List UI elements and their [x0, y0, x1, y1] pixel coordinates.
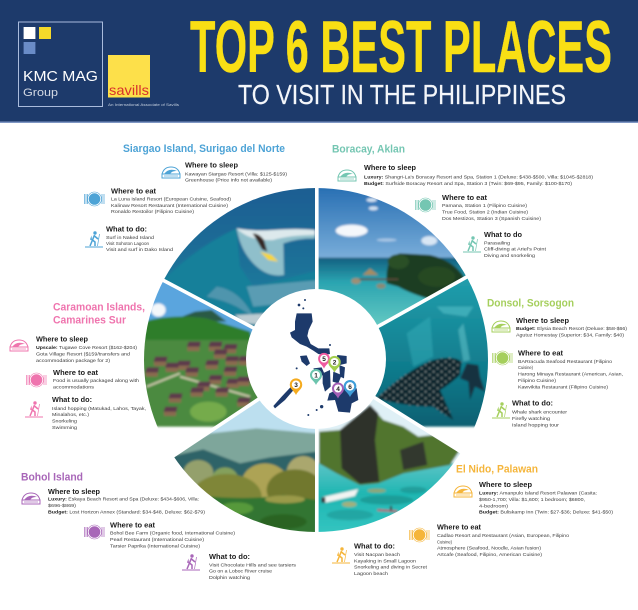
map: Philippine islands — [273, 299, 358, 416]
text: where to sleep: $950-1,700; Villa: $1,600; 1 bedroom; $6800, — [479, 497, 585, 503]
text: what to do: Visit Chocolate Hills and see tarsiers — [209, 562, 297, 568]
heading: Caramoan: Caramoan Islands, — [53, 302, 145, 314]
heading: Siargao: Siargao Island, Surigao del Norte — [123, 143, 285, 155]
text: where to sleep: Upscale: Tugawe Cove Resort ($162-$204) — [36, 345, 137, 351]
icon: eat — [493, 351, 512, 365]
pin 3 — [290, 378, 302, 395]
text: what to do: Go on a Loboc River cruise — [209, 569, 272, 575]
text: what to do: Lagoon beach — [354, 571, 388, 577]
text: where to sleep: Gota Village Resort ($159/transfers and — [36, 352, 130, 358]
text: what to do — [52, 395, 146, 431]
text: where to sleep: Luxury: Eskaya Beach Resort and Spa (Deluxe: $434-$606, Villa: — [48, 497, 199, 503]
text: where to sleep: Where to sleep — [516, 316, 569, 325]
text: what to do: Firefly watching — [512, 416, 550, 422]
text: what to do — [484, 230, 547, 259]
text: where to sleep: Budget: Surfside Boracay Resort and Spa, Station 3 (Twin: $69-$95, Family: $100-$170) — [364, 181, 572, 187]
heading: Boracay: Boracay, Aklan — [332, 144, 405, 156]
heading: Donsol: Donsol, Sorsogon — [487, 298, 574, 310]
logo: savills: An International Associate of Savills — [108, 102, 179, 107]
icon: eat — [85, 525, 104, 539]
heading: Caramoan: Camarines Sur — [53, 314, 127, 326]
text: where to sleep: Kawayan Siargao Resort (Villa: $125-$159) — [185, 172, 287, 178]
text: where to eat — [111, 186, 231, 215]
heading: El Nido: El Nido, Palawan — [456, 464, 538, 476]
text: where to sleep — [516, 316, 627, 338]
text: where to eat — [442, 193, 541, 222]
text: where to sleep — [364, 163, 593, 187]
photo: El Nido lagoon — [318, 399, 460, 532]
pin numbers: 5 — [322, 356, 326, 363]
icon: eat — [416, 198, 435, 212]
pin 1 — [310, 369, 322, 385]
text: what to do: Minalahos, etc.) — [52, 412, 89, 418]
text: what to do: Snorkeling — [52, 418, 77, 424]
photo: whale shark and diver, Donsol — [375, 278, 488, 428]
text: where to eat: Artcafe (Seafood, Filipino, American Cuisine) — [437, 552, 542, 558]
text: what to do: Visit Nacpan beach — [354, 552, 400, 558]
text: where to sleep: Agutuz Homestay (Superior: $34, Family: $40) — [516, 332, 624, 338]
text: where to eat — [518, 349, 623, 390]
text: what to do: What to do: — [209, 552, 250, 561]
text: where to eat: Cuisine) — [437, 539, 452, 545]
text: where to eat: Cadlao Resort and Restaurant (Asian, European, Filipino — [437, 533, 569, 539]
pin numbers — [294, 356, 352, 393]
text: where to sleep: Budget: Buliskamp Inn (Twin: $27-$36; Deluxe: $41-$50) — [479, 510, 613, 516]
text: where to sleep: Where to sleep — [364, 163, 416, 172]
icon: sleep — [492, 321, 510, 332]
logo: savills: savills — [109, 82, 149, 98]
icon: do — [463, 236, 481, 252]
text: where to sleep: $696-$869) — [48, 503, 76, 509]
icon: do — [332, 547, 350, 563]
pin numbers: 2 — [333, 360, 337, 366]
text: what to do: Visit Sohoton Lagoon — [106, 241, 149, 247]
text: what to do: Dolphin watching — [209, 575, 250, 581]
text: what to do: What to do: — [52, 395, 92, 404]
map of the Philippines with pins — [246, 289, 386, 429]
text: where to eat — [110, 521, 235, 549]
header banner — [0, 0, 638, 123]
text: where to eat: Bohol Bee Farm (Organic food, International Cuisine) — [110, 531, 235, 537]
text: where to eat — [437, 523, 569, 558]
icon: do — [182, 554, 200, 570]
text: where to eat: Where to eat — [437, 523, 482, 532]
wheel dividers — [140, 180, 490, 540]
text: where to sleep: Where to sleep — [479, 480, 532, 489]
text: what to do: Surf in Naked Island — [106, 235, 154, 241]
icon: sleep — [22, 493, 40, 504]
photo: Chocolate Hills, Bohol — [174, 400, 315, 532]
panel: Donsol — [487, 298, 627, 428]
text: what to do: Island hopping (Matukad, Lahos, Tayak, — [52, 406, 146, 412]
text: where to sleep: Budget: Lost Horizon Annex (Standard: $34-$48, Deluxe: $62-$79) — [48, 510, 205, 516]
icon: do — [25, 401, 43, 417]
panel: Bohol Island — [21, 472, 297, 581]
text: where to eat: Where to eat — [53, 368, 99, 377]
text: where to sleep: 4-bedroom) — [479, 503, 508, 509]
text: where to sleep: Where to sleep — [36, 334, 88, 344]
pin 5 — [318, 353, 330, 368]
logo: KMC MAG Group: Group — [23, 87, 58, 99]
text: what to do: Kayaking in Small Lagoon — [354, 558, 416, 564]
pin numbers: 3 — [294, 382, 298, 389]
icon: sleep — [338, 170, 356, 181]
text: where to eat: accommodations — [53, 384, 95, 390]
text: what to do: Cliff-diving at Ariel's Point — [484, 247, 547, 253]
photo: surfer on a wave, Siargao — [164, 188, 315, 326]
text: what to do: What to do: — [354, 542, 395, 551]
text: where to sleep: Budget: Elysia Beach Resort (Deluxe: $58-$66) — [516, 326, 627, 332]
photo: Caramoan resort — [144, 282, 258, 428]
panel: Siargao Island — [85, 143, 287, 253]
pin numbers: 4 — [336, 386, 340, 393]
text: where to eat: Harong Minaya Restaurant (American, Asian, — [518, 372, 623, 378]
photo: Boracay beach — [318, 188, 466, 325]
icon: sleep — [162, 167, 180, 178]
text: what to do: What to do: — [106, 225, 147, 234]
text: what to do — [106, 225, 173, 253]
text: what to do: Whale shark encounter — [512, 410, 567, 416]
icon: eat — [85, 192, 104, 206]
text: where to eat: La Luna Island Resort (European Cuisine, Seafood) — [111, 197, 231, 203]
logo: KMC MAG Group: KMC MAG — [23, 69, 98, 85]
text: what to do: Visit and surf in Dako Island — [106, 247, 173, 253]
heading: Caramoan — [53, 302, 145, 326]
text: where to sleep — [36, 334, 137, 364]
text: what to do: Island hopping tour — [512, 422, 559, 428]
text: where to eat: Where to eat — [110, 521, 156, 530]
icon: do — [492, 402, 510, 418]
text: where to sleep: Where to sleep — [185, 160, 238, 170]
heading: Bohol: Bohol Island — [21, 472, 83, 484]
panel: Caramoan Islands — [10, 302, 146, 431]
text: what to do — [209, 552, 297, 581]
text: what to do: Diving and snorkeling — [484, 253, 535, 259]
text: where to eat: Cuisine) — [518, 365, 533, 371]
text: where to sleep: Where to sleep — [48, 487, 100, 496]
text: where to eat: BARracuda Seafood Restaurant (Filipino — [518, 359, 612, 365]
text: where to sleep: Luxury: Shangri-La's Boracay Resort and Spa, Station 1 (Deluxe: $438-$500, Villa: $1045-$2818) — [364, 175, 593, 181]
logo: KMC MAG Group — [18, 22, 102, 106]
text: where to eat: Where to eat — [518, 349, 564, 358]
text: what to do: Snorkeling and diving in Secret — [354, 565, 428, 571]
text: what to do — [512, 399, 567, 428]
text: where to sleep — [479, 480, 613, 516]
logo: savills — [108, 55, 179, 107]
text: where to sleep — [48, 487, 205, 516]
text: where to eat: Ronaldo Restoilor (Filipino Cuisine) — [111, 209, 194, 215]
subtitle: TO VISIT IN THE PHILIPPINES — [238, 79, 566, 110]
text: where to eat: Where to eat — [111, 186, 157, 196]
icon: sleep — [454, 486, 472, 497]
text: where to sleep: Greenhouse (Price info not available) — [185, 178, 272, 184]
text: where to eat: Pamana, Station 1 (Filipino Cuisine) — [442, 203, 527, 209]
text: where to eat: Food is usually packaged along with — [53, 378, 139, 384]
text: what to do: Parasailing — [484, 240, 510, 246]
text: where to eat: Kawvikita Restaurant (Filipino Cuisine) — [518, 384, 608, 390]
pin numbers: 1 — [314, 372, 318, 380]
text: where to eat: Tarsier Paprika (International Cuisine) — [110, 543, 200, 549]
text: where to eat: True Food, Station 2 (Indian Cuisine) — [442, 210, 528, 216]
icon: eat — [27, 373, 46, 387]
text: where to eat: Where to eat — [442, 193, 488, 202]
text: where to eat: Filipino Cuisine) — [518, 378, 556, 384]
text: where to eat: Kalinaw Resort Restaurant (International Cuisine) — [111, 203, 228, 209]
text: what to do — [354, 542, 428, 577]
panel: El Nido — [332, 464, 613, 577]
text: where to sleep: Luxury: Amanpulo Island Resort Palawan (Casita: — [479, 491, 597, 497]
pin 2 — [328, 356, 341, 372]
text: where to eat: Pearl Restaurant (International Cuisine) — [110, 537, 204, 543]
text: what to do: What to do — [484, 230, 522, 239]
pin 6 — [344, 380, 356, 397]
icon: sleep — [10, 340, 28, 351]
text: where to eat: Dos Mestizos, Station 3 (Spanish Cuisine) — [442, 216, 541, 222]
photo wheel — [144, 188, 488, 532]
text: where to sleep — [185, 160, 287, 184]
text: what to do: What to do: — [512, 399, 553, 408]
icon: eat — [410, 528, 429, 542]
text: where to eat — [53, 368, 139, 390]
icon: do — [85, 231, 103, 247]
pin 4 — [332, 382, 344, 398]
text: where to sleep: accommodation package for 2) — [36, 358, 110, 364]
pin numbers: 6 — [348, 384, 352, 391]
text: where to eat: Atmosphere (Seafood, Noodle, Asian fusion) — [437, 546, 541, 552]
text: what to do: Swimming — [52, 425, 77, 431]
panel: Boracay — [332, 144, 593, 259]
